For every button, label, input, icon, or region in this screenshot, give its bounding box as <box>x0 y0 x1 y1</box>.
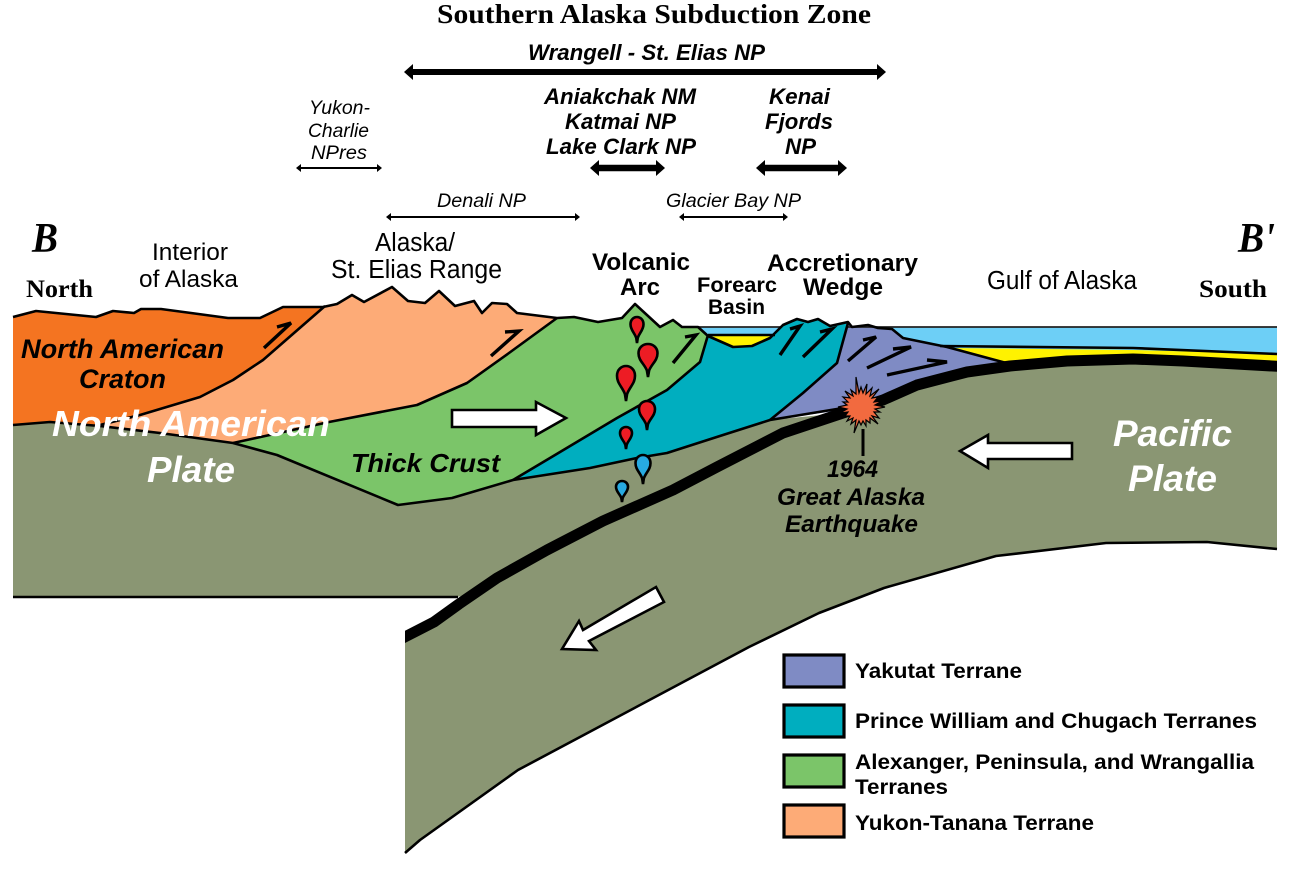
label: Accretionary Wedge <box>767 250 918 301</box>
park range: Kenai Fjords NP: NP <box>785 134 816 159</box>
Pacific plate slab <box>405 359 1277 853</box>
section label: B North: B <box>31 216 58 262</box>
label: Pacific Plate: Plate <box>1128 458 1217 499</box>
park range: Glacier Bay NP: Glacier Bay NP <box>666 190 801 212</box>
legend item: Alexanger, Peninsula, and Wrangallia Terranes <box>784 751 1254 799</box>
park range: Aniakchak, Katmai, Lake Clark: Aniakchak NM <box>543 84 697 109</box>
park range: Aniakchak, Katmai, Lake Clark <box>543 84 697 176</box>
label: Forearc Basin: Forearc <box>697 273 777 297</box>
North American plate mantle <box>13 413 843 597</box>
section label: B' South: B' <box>1237 216 1275 262</box>
label: 1964 Great Alaska Earthquake <box>777 456 925 538</box>
park range: Kenai Fjords NP <box>756 84 847 176</box>
park range: Kenai Fjords NP: Fjords <box>765 109 833 134</box>
park range: Wrangell - St. Elias NP <box>404 40 886 80</box>
North American Craton terrane <box>13 307 323 426</box>
park range: Kenai Fjords NP: Kenai <box>769 84 831 109</box>
label: Interior of Alaska: of Alaska <box>139 266 238 293</box>
label: Alaska / St. Elias Range: St. Elias Range <box>331 256 502 284</box>
label: North American Craton <box>21 334 224 394</box>
legend <box>784 655 1257 837</box>
Prince William and Chugach terranes <box>513 319 848 480</box>
label: North American Craton: Craton <box>79 364 166 394</box>
label: 1964 Great Alaska Earthquake: 1964 <box>827 456 878 483</box>
arrow: North American plate motion <box>452 402 566 435</box>
label: Gulf of Alaska: Gulf of Alaska <box>987 267 1138 295</box>
legend item: Yakutat Terrane: Yakutat Terrane <box>855 660 1022 683</box>
label: Pacific Plate: Pacific <box>1113 413 1232 454</box>
legend item: Prince William and Chugach Terranes <box>784 705 1257 737</box>
label: Alaska / St. Elias Range: Alaska/ <box>375 229 456 257</box>
legend item: Yukon-Tanana Terrane <box>784 805 1094 837</box>
legend item: Alexanger, Peninsula, and Wrangallia Terranes: Terranes <box>855 776 948 799</box>
earthquake leader line <box>862 429 864 456</box>
label: Pacific Plate <box>1113 413 1232 499</box>
thrust fault arrows <box>264 323 947 375</box>
label: North American Craton: North American <box>21 334 224 364</box>
label: Volcanic Arc <box>592 249 690 301</box>
park range: Yukon-Charlie NPres <box>296 98 382 172</box>
cross section diagram <box>13 287 1290 853</box>
park range: Denali NP: Denali NP <box>437 190 526 212</box>
arrow: slab descent <box>562 587 664 650</box>
ocean-floor sediment <box>950 348 1277 363</box>
subducting slab top (black band) <box>395 359 1290 642</box>
label: Interior of Alaska <box>139 239 238 293</box>
park range: Aniakchak, Katmai, Lake Clark: Lake Clark NP <box>546 134 696 159</box>
Alexander, Peninsula and Wrangellia terranes <box>233 304 708 505</box>
label: North American Plate <box>52 403 330 490</box>
section label: B' South <box>1199 216 1275 303</box>
label: Alaska / St. Elias Range <box>331 229 502 284</box>
legend item: Yukon-Tanana Terrane: Yukon-Tanana Terrane <box>855 812 1094 835</box>
Yukon-Tanana terrane <box>100 287 557 443</box>
section label: B' South: South <box>1199 276 1267 303</box>
label: Volcanic Arc: Arc <box>620 274 660 301</box>
label: Accretionary Wedge: Accretionary <box>767 250 918 277</box>
park range: Yukon-Charlie NPres: NPres <box>311 143 368 164</box>
legend item: Yakutat Terrane <box>784 655 1022 687</box>
legend item: Prince William and Chugach Terranes: Prince William and Chugach Terranes <box>855 710 1257 733</box>
magma pins: volcanic arc <box>617 317 658 449</box>
geologic contact lines <box>13 287 1277 853</box>
arrow: Pacific plate motion <box>960 435 1072 468</box>
park range: Yukon-Charlie NPres: Yukon- <box>309 98 370 119</box>
park range: Denali NP <box>386 190 580 221</box>
label: 1964 Great Alaska Earthquake: Great Alaska <box>777 484 925 511</box>
ocean <box>698 327 1277 367</box>
section label: B North <box>26 216 93 303</box>
park range: Aniakchak, Katmai, Lake Clark: Katmai NP <box>565 109 676 134</box>
section label: B North: North <box>26 276 93 303</box>
label: Forearc Basin: Basin <box>708 295 765 319</box>
park range: Yukon-Charlie NPres: Charlie <box>308 121 369 142</box>
label: Forearc Basin <box>697 273 777 319</box>
label: North American Plate: North American <box>52 403 330 444</box>
label: Thick Crust: Thick Crust <box>351 448 501 478</box>
label: Accretionary Wedge: Wedge <box>803 274 883 301</box>
forearc basin sediment <box>712 336 772 347</box>
Yakutat terrane <box>770 322 1000 420</box>
fluid pins: slab melt <box>616 455 650 502</box>
label: North American Plate: Plate <box>147 449 235 490</box>
label: Interior of Alaska: Interior <box>152 239 228 266</box>
label: 1964 Great Alaska Earthquake: Earthquake <box>785 511 918 538</box>
label: Volcanic Arc: Volcanic <box>592 249 690 276</box>
park range: Wrangell - St. Elias NP: Wrangell - St. Elias NP <box>528 40 765 65</box>
legend item: Alexanger, Peninsula, and Wrangallia Terranes: Alexanger, Peninsula, and Wrangallia <box>855 751 1254 774</box>
icon: earthquake burst <box>838 377 885 433</box>
